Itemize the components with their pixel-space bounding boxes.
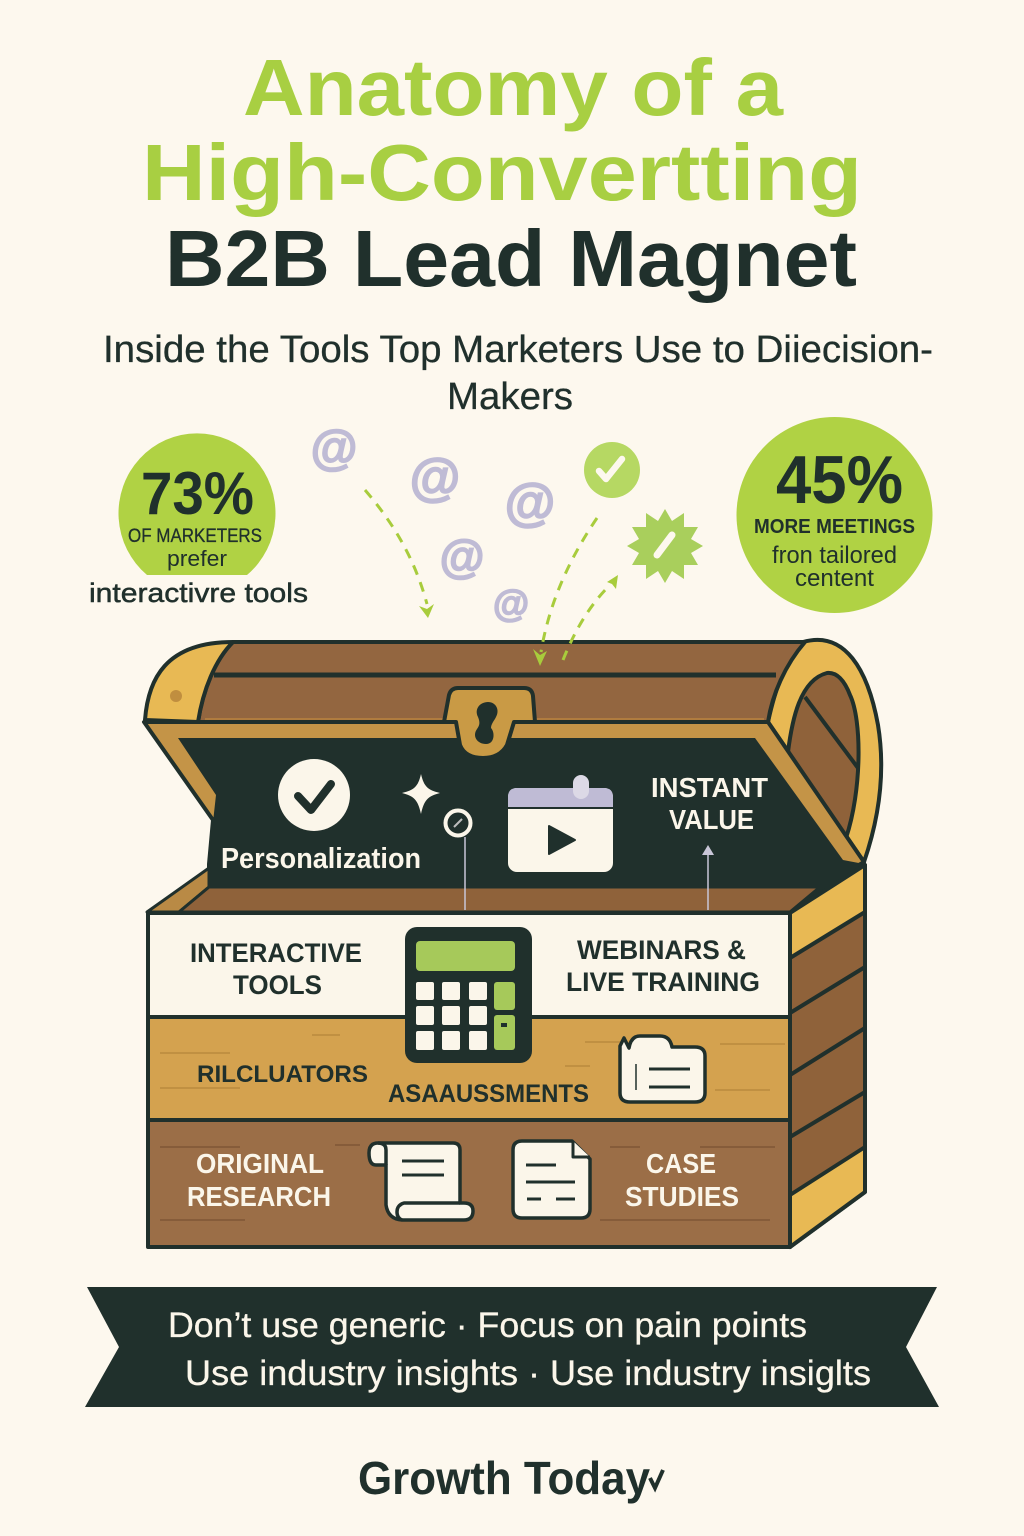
stat badge: 45%: [736, 417, 932, 613]
label: interactive tools: INTERACTIVE: [190, 938, 362, 968]
chest lid: right end ring: [768, 640, 881, 862]
arrow: leads falling into the chest: [365, 490, 434, 618]
title: High-Convertting: [142, 128, 862, 217]
icon: small target pin with line: [446, 810, 470, 910]
chest row: white shelf: [148, 913, 790, 1017]
lid underside: dark panel: [178, 738, 864, 913]
icon: sparkle: [402, 774, 440, 814]
label: original research: RESEARCH: [187, 1181, 331, 1212]
title: Anatomy of a: [243, 43, 784, 132]
label: case studies: [625, 1148, 739, 1212]
label: webinars and live training: [566, 935, 760, 997]
chest row: brown shelf: [148, 1120, 790, 1247]
banner: [85, 1287, 939, 1407]
chest lid: top: [198, 642, 805, 722]
label: instant value: INSTANT: [651, 772, 768, 803]
stat badge: 73%: OF MARKETERS: [128, 526, 262, 547]
icons: at symbols: @: [410, 449, 460, 507]
icon: folder: [620, 1036, 705, 1102]
stat badge: 45%: MORE MEETINGS: [754, 516, 915, 538]
stat badge: 73%: 73%: [141, 460, 254, 527]
interior: floor: [147, 868, 820, 912]
subtitle: Makers: [447, 376, 573, 418]
label: case studies: CASE: [646, 1148, 716, 1179]
icon: calculator: [405, 927, 532, 1063]
icons: at symbols: @: [505, 474, 555, 532]
stat badge: 73%: prefer: [167, 546, 227, 571]
label: interactive tools: [190, 938, 362, 1000]
label: case studies: STUDIES: [625, 1181, 739, 1212]
icon: video calendar: [508, 775, 613, 872]
icon: green star badge: [627, 509, 703, 583]
chest row: gold shelf: [148, 1017, 790, 1120]
arrow: content flowing out to the badge: [563, 575, 618, 660]
stat badge: 73%: [89, 433, 308, 608]
icon: scroll: [369, 1143, 473, 1220]
banner: Use industry insights · Use industry insiglts: [185, 1354, 871, 1393]
title: [142, 43, 862, 303]
stat badge: 73%: interactivre tools: [89, 578, 308, 608]
treasure chest: [144, 640, 881, 1247]
label: instant value: [651, 772, 768, 835]
chest lock: [444, 688, 535, 758]
footer brand: Growth Today: [358, 1452, 650, 1504]
label: interactive tools: TOOLS: [233, 970, 322, 1000]
icon: document: [513, 1141, 590, 1218]
icons: at symbols: @: [311, 422, 357, 475]
lid underside: gold frame: [144, 722, 864, 888]
chest side planks: [790, 865, 865, 1247]
stat badge: 45%: centent: [795, 565, 874, 592]
icons: at symbols: @: [440, 530, 484, 582]
label: original research: [187, 1148, 331, 1212]
stat badge: 45%: fron tailored: [772, 542, 897, 569]
label: instant value: VALUE: [669, 804, 754, 835]
banner: Don’t use generic · Focus on pain points: [168, 1306, 807, 1345]
label: webinars and live training: WEBINARS &: [577, 935, 746, 965]
subtitle: Inside the Tools Top Marketers Use to Diiecision-: [103, 329, 933, 371]
icons: at symbols: [311, 422, 555, 624]
arrow: content flowing into the chest: [533, 518, 597, 666]
stat badge: 45%: 45%: [776, 442, 903, 518]
label: personalization: Personalization: [221, 843, 421, 875]
label: original research: ORIGINAL: [196, 1148, 324, 1179]
icons: at symbols: @: [493, 583, 529, 624]
label: calculators: RILCLUATORS: [197, 1061, 368, 1088]
label: assessments: ASAAUSSMENTS: [388, 1080, 589, 1108]
icon: green check circle: [584, 442, 640, 498]
chest lid: left gold corner: [145, 642, 233, 722]
label: webinars and live training: LIVE TRAINING: [566, 967, 760, 997]
icon: personalization check: [278, 759, 350, 831]
arrow: instant value: [702, 845, 714, 910]
subtitle: [103, 329, 933, 418]
title: B2B Lead Magnet: [165, 214, 857, 303]
